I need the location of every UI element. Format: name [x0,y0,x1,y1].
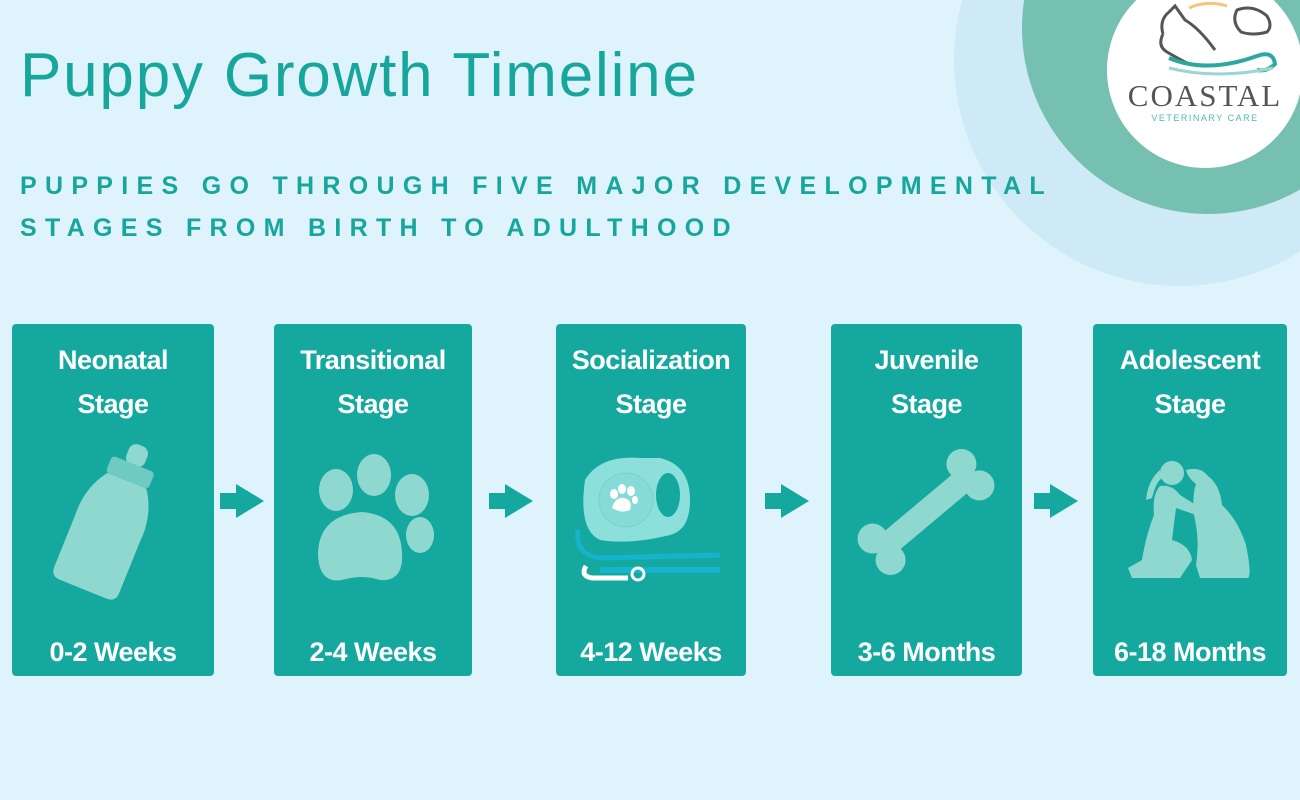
card: juvenile: Stage [891,389,962,419]
card: adolescent [1093,324,1287,676]
card: neonatal: Neonatal [58,345,168,375]
icon: paw [318,454,434,580]
card: socialization: 4-12 Weeks [580,637,722,667]
card: juvenile: 3-6 Months [858,637,995,667]
arrow 1 [220,484,264,518]
card: socialization: Stage [615,389,687,419]
card: socialization [556,324,746,676]
card: neonatal: Stage [77,389,149,419]
logo: COASTAL [1128,78,1282,113]
icon: retractable leash [578,458,720,580]
card: adolescent: Adolescent [1120,345,1260,375]
card: transitional: Transitional [300,345,446,375]
card: neonatal [12,324,214,676]
icon: bone [851,443,1001,581]
title: Puppy Growth Timeline [20,41,699,110]
logo: VETERINARY CARE [1151,113,1259,123]
card: juvenile [831,324,1022,676]
card: adolescent: Stage [1154,389,1226,419]
arrow 3 [765,484,809,518]
icon: woman and dog [1128,461,1250,578]
teal circle [1022,0,1300,214]
card: socialization: Socialization [572,345,730,375]
card: transitional: 2-4 Weeks [309,637,437,667]
card: juvenile: Juvenile [874,345,979,375]
decorative background circle [954,0,1300,286]
subtitle: PUPPIES GO THROUGH FIVE MAJOR DEVELOPMENTAL [20,172,1053,200]
subtitle [20,172,1053,242]
card: transitional [274,324,472,676]
card: adolescent: 6-18 Months [1114,637,1266,667]
subtitle: STAGES FROM BIRTH TO ADULTHOOD [20,214,739,242]
arrow 4 [1034,484,1078,518]
logo [1107,0,1300,168]
arrow 2 [489,484,533,518]
card: transitional: Stage [337,389,409,419]
card: neonatal: 0-2 Weeks [49,637,177,667]
icon: baby bottle [50,432,174,602]
